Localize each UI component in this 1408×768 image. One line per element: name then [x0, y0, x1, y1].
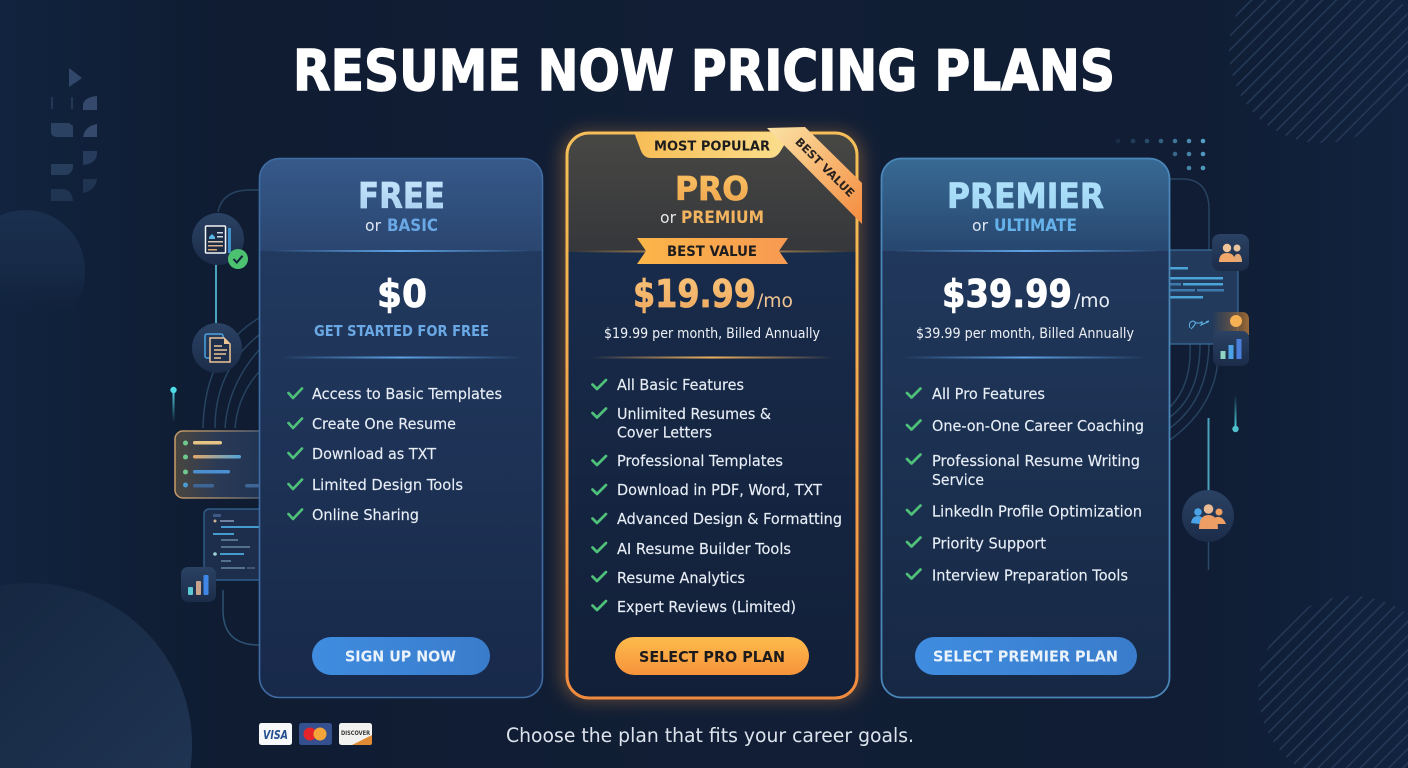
feature list: premier: Professional Resume Writing: [932, 452, 1140, 470]
icon: resume with check: [192, 213, 248, 269]
feature list: premier: All Pro Features: [932, 385, 1045, 403]
subheading: or premium: or: [660, 208, 676, 227]
decoration: bottom-left circle: [0, 583, 192, 768]
feature list: free: Access to Basic Templates: [312, 385, 502, 403]
icon: left bar chart: [181, 567, 216, 602]
title: RESUME NOW PRICING PLANS: [293, 39, 1115, 104]
feature list: free: [288, 385, 502, 524]
button: sign up now: [312, 637, 490, 675]
feature list: pro: Cover Letters: [617, 424, 712, 442]
subheading: or premium: PREMIUM: [681, 208, 764, 227]
feature list: pro: All Basic Features: [617, 376, 744, 394]
right teal connector: [1208, 418, 1210, 492]
tab: most popular: [634, 132, 792, 158]
corner ribbon: best value: [767, 127, 862, 224]
panel: left document card: [204, 509, 264, 580]
panel: premier plan: [882, 158, 1170, 698]
decoration: dot grid: [1116, 139, 1205, 170]
button: select pro plan: [615, 637, 809, 675]
feature list: pro: Unlimited Resumes &: [617, 405, 771, 423]
footer tagline: Choose the plan that fits your career goals.: [506, 724, 914, 747]
tagline: get started: GET STARTED FOR FREE: [314, 322, 489, 340]
card: mastercard: [299, 723, 332, 745]
ribbon: best value: [637, 238, 788, 264]
feature list: premier: Priority Support: [932, 534, 1046, 552]
left teal connector: [215, 264, 217, 324]
lower right connector: [1208, 540, 1210, 570]
teal pin left: [170, 387, 177, 422]
feature list: free: Create One Resume: [312, 415, 456, 433]
payment cards: [259, 723, 372, 745]
feature list: pro: [592, 376, 842, 616]
icon: right people badge: [1212, 234, 1249, 271]
subheading: or basic: [365, 216, 438, 236]
feature list: free: Download as TXT: [312, 445, 437, 463]
feature list: premier: Interview Preparation Tools: [932, 566, 1128, 584]
feature list: premier: One-on-One Career Coaching: [932, 417, 1144, 435]
billing note: premier: $39.99 per month, Billed Annually: [916, 326, 1134, 342]
feature list: premier: [907, 385, 1144, 584]
feature list: pro: Download in PDF, Word, TXT: [617, 481, 823, 499]
feature list: pro: Professional Templates: [617, 452, 783, 470]
button: select pro plan: SELECT PRO PLAN: [639, 648, 785, 666]
price: pro: /mo: [757, 290, 793, 312]
billing note: pro: $19.99 per month, Billed Annually: [604, 326, 820, 342]
decoration: abstract left shapes: [51, 68, 97, 201]
subheading: or basic: BASIC: [387, 216, 438, 236]
decoration: hatched circle top right: [1229, 0, 1408, 143]
button: select premier plan: SELECT PREMIER PLAN: [933, 648, 1118, 666]
ribbon: best value: BEST VALUE: [667, 244, 757, 260]
icon: documents: [192, 323, 242, 373]
pro card glow: [562, 132, 862, 700]
teal pin right: [1232, 395, 1239, 432]
price: premier: $39.99: [942, 272, 1072, 316]
subheading: or ultimate: or: [972, 216, 988, 235]
feature list: pro: Resume Analytics: [617, 569, 745, 587]
decoration: hatched circle bottom right: [1258, 596, 1408, 768]
orange glow tab: [1212, 312, 1249, 335]
feature list: free: Limited Design Tools: [312, 476, 463, 494]
card: discover: DISCOVER: [341, 729, 370, 737]
panel: pro plan: [567, 127, 862, 698]
feature list: premier: Service: [932, 471, 984, 489]
price: free: $0: [377, 272, 427, 316]
right connector lines: [1170, 179, 1218, 440]
button: select premier plan: [915, 637, 1137, 675]
decoration: left small circle: [0, 210, 85, 315]
tab: most popular: MOST POPULAR: [654, 138, 771, 154]
card: visa: VISA: [263, 727, 288, 742]
price: pro: $19.99: [633, 272, 756, 316]
subheading: or basic: or: [365, 216, 381, 235]
heading: free: FREE: [358, 176, 445, 217]
panel: free plan: [260, 158, 542, 698]
subheading: or ultimate: ULTIMATE: [994, 216, 1077, 235]
icon: right people circle: [1182, 490, 1234, 542]
feature list: pro: Advanced Design & Formatting: [617, 510, 842, 528]
button: sign up now: SIGN UP NOW: [345, 648, 456, 666]
corner ribbon: best value: BEST VALUE: [792, 135, 858, 200]
price: premier: /mo: [1074, 290, 1110, 312]
left connector lines: [203, 190, 259, 645]
panel: left floating list card: [175, 431, 265, 498]
feature list: premier: LinkedIn Profile Optimization: [932, 502, 1142, 520]
feature list: free: Online Sharing: [312, 506, 419, 524]
icon: right bar chart: [1213, 331, 1249, 366]
heading: premier: PREMIER: [947, 177, 1104, 217]
heading: pro: PRO: [675, 169, 749, 208]
panel: right document card: [1160, 250, 1238, 344]
feature list: pro: Expert Reviews (Limited): [617, 598, 796, 616]
feature list: pro: AI Resume Builder Tools: [617, 540, 791, 558]
